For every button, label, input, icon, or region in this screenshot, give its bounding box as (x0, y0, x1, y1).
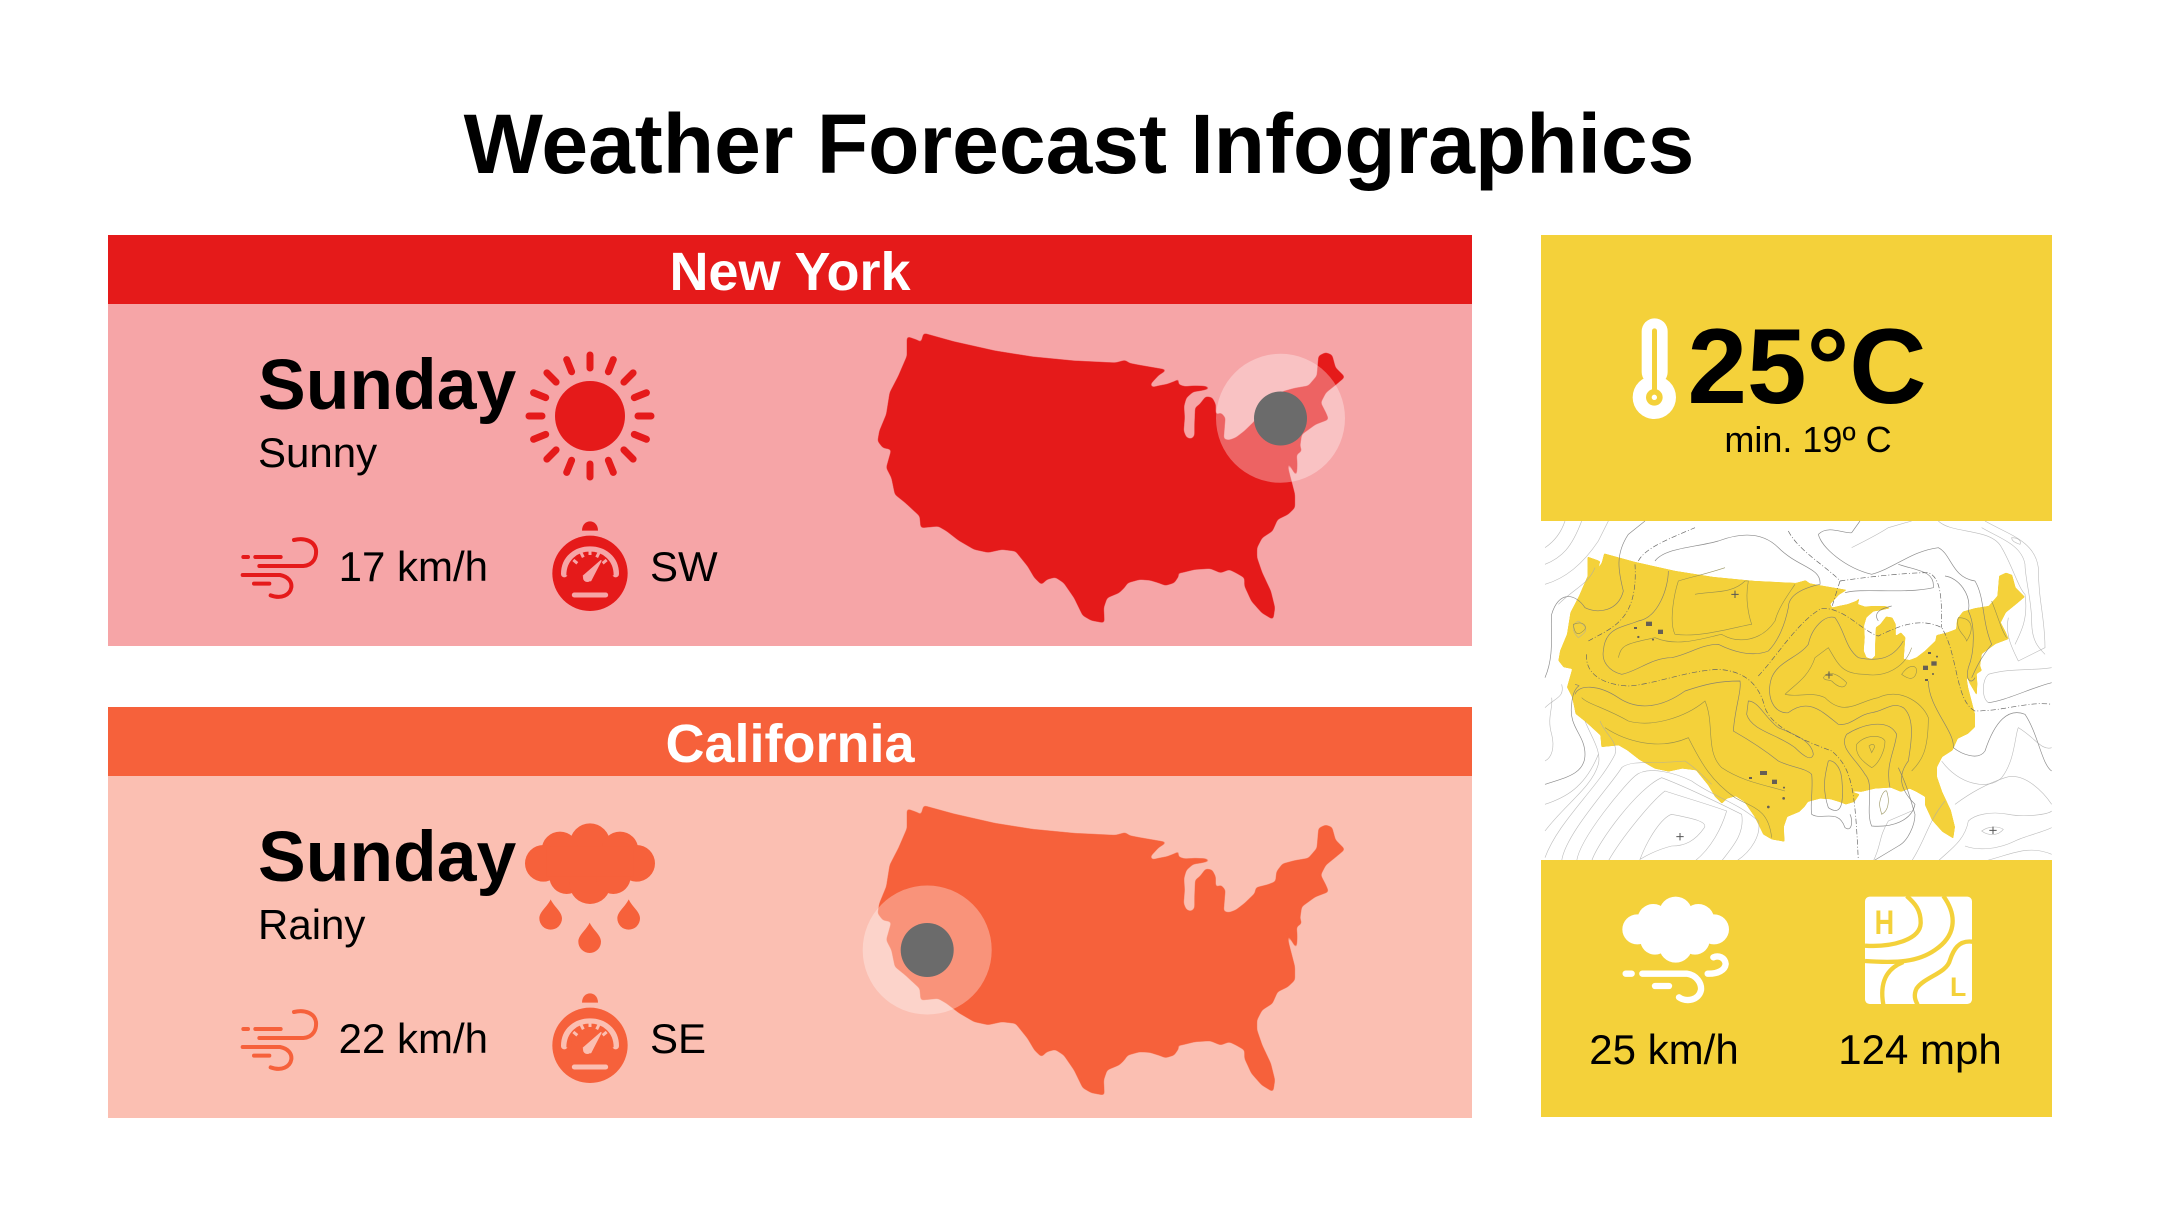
panel: New York (108, 235, 1472, 646)
temperature value: 25°C (1687, 306, 1927, 426)
plus marks (1676, 591, 1997, 840)
icon: pressure map: H (1875, 903, 1894, 942)
heading: New York (108, 235, 1472, 304)
wind speed: 22 km/h (339, 1015, 488, 1062)
title: Weather Forecast Infographics (464, 97, 1694, 191)
map: United States with California marker (863, 806, 1345, 1095)
icon: sun (529, 355, 651, 477)
icon: gauge (552, 521, 628, 611)
map markers (1634, 622, 1938, 808)
icon: cloud with wind (1622, 897, 1729, 1000)
icon: pressure map (1865, 896, 1972, 1005)
icon: gauge (552, 993, 628, 1083)
minimum temperature: min. 19º C (1724, 419, 1892, 460)
marker: New York (1216, 354, 1345, 483)
pressure value: 124 mph (1838, 1026, 2002, 1073)
condition: Rainy (258, 901, 365, 948)
condition: Sunny (258, 429, 377, 476)
icon: rain cloud (525, 823, 655, 953)
dashed routes (1587, 528, 2052, 861)
chart: topographic weather map (1541, 521, 2052, 861)
wind direction: SW (650, 543, 718, 590)
wind value: 25 km/h (1589, 1026, 1739, 1073)
icon: thermometer (1633, 318, 1676, 419)
heading: California: California (665, 714, 915, 774)
contour lines (1545, 521, 2052, 861)
icon: pressure map: L (1950, 972, 1966, 1002)
panel: California (108, 707, 1472, 1118)
icon: wind (243, 539, 316, 597)
panel: wind and pressure (1541, 860, 2052, 1117)
day: Sunday (258, 345, 516, 425)
panel: temperature (1541, 235, 2052, 521)
map: United States with New York marker (878, 333, 1345, 623)
map: yellow United States (1558, 553, 2025, 842)
icon: wind (243, 1011, 316, 1069)
day: Sunday (258, 817, 516, 897)
wind direction: SE (650, 1015, 706, 1062)
wind speed: 17 km/h (339, 543, 488, 590)
heading: New York: New York (669, 242, 912, 302)
heading: California (108, 707, 1472, 776)
marker: California (863, 886, 992, 1014)
